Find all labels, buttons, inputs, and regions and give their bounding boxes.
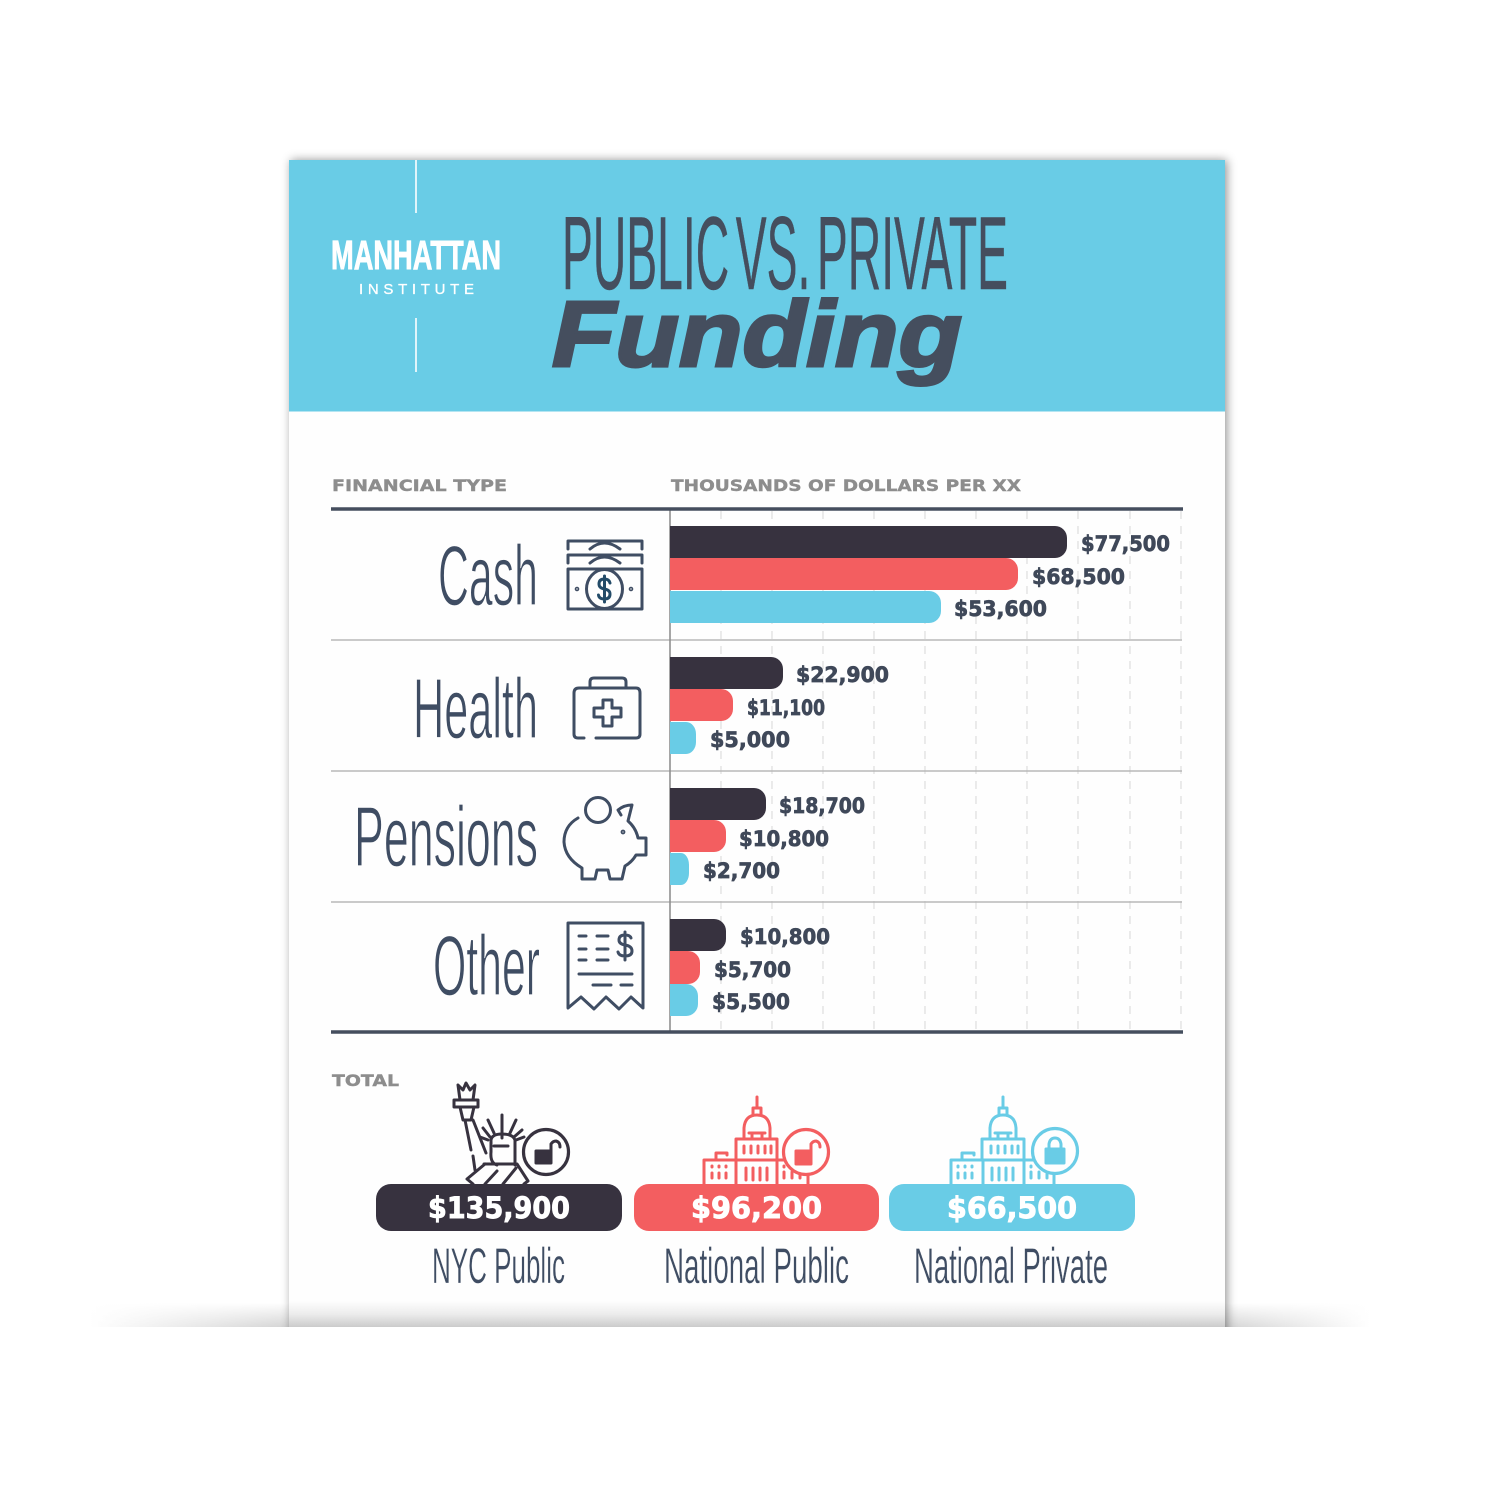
bars: Pensions: $2,700 — [703, 859, 780, 883]
icon: receipt — [568, 923, 643, 1009]
bars: Pensions: $18,700 — [779, 794, 865, 818]
logo: Manhattan Institute — [331, 160, 501, 372]
row: Other — [433, 919, 830, 1016]
bars: Health: $11,100 — [747, 696, 825, 720]
bars: Pensions — [670, 788, 865, 885]
bars: Cash: $77,500 — [1081, 532, 1170, 556]
icon: capitol building with closed lock — [951, 1097, 1078, 1184]
logo: Manhattan Institute: MANHATTAN — [331, 232, 501, 278]
label: National Public: National Public — [664, 1238, 849, 1294]
label: Pensions: Pensions — [354, 790, 538, 885]
bars: Other: $5,500 — [712, 990, 790, 1014]
row: Health — [413, 657, 889, 757]
bars: Other — [670, 919, 830, 1016]
total: National Public: $96,200 — [691, 1191, 822, 1225]
pill: $96,200 — [634, 1184, 879, 1231]
icon: cash bills — [568, 541, 642, 609]
bars: Pensions: $10,800 — [739, 827, 829, 851]
header band — [289, 160, 1225, 412]
title: Funding — [552, 282, 962, 386]
total: National Private: $66,500 — [947, 1191, 1077, 1225]
label: Cash: Cash — [438, 529, 538, 624]
bars: Other: $10,800 — [740, 925, 830, 949]
title — [552, 196, 1008, 386]
icon: Statue of Liberty with open lock — [454, 1083, 568, 1184]
bars: Health: $22,900 — [796, 663, 889, 687]
row: Cash — [438, 526, 1170, 624]
bars: Other: $5,700 — [714, 958, 791, 982]
chart grid — [331, 509, 1183, 1032]
label: National Private: National Private — [914, 1238, 1108, 1294]
bars: Health: $5,000 — [710, 728, 790, 752]
label: Health: Health — [413, 662, 538, 757]
icon: first aid kit — [574, 678, 640, 738]
column heading: financial type: FINANCIAL TYPE — [332, 476, 507, 495]
heading: total: TOTAL — [332, 1071, 399, 1090]
total: National Private — [889, 1097, 1135, 1294]
pill: $66,500 — [889, 1184, 1135, 1231]
total: NYC Public — [376, 1083, 622, 1294]
bars: Cash — [670, 526, 1170, 623]
bars: Cash: $68,500 — [1032, 565, 1125, 589]
card bottom shadow — [289, 1301, 1225, 1327]
bars: Cash: $53,600 — [954, 597, 1047, 621]
total: National Public — [634, 1097, 879, 1294]
logo: Manhattan Institute: INSTITUTE — [359, 281, 474, 298]
column heading: thousands of dollars: THOUSANDS OF DOLLARS PER XX — [671, 476, 1022, 495]
row: Pensions — [354, 788, 865, 885]
total: NYC Public: $135,900 — [428, 1191, 570, 1225]
bars: Health — [670, 657, 889, 754]
pill: $135,900 — [376, 1184, 622, 1231]
label: Other: Other — [433, 919, 540, 1014]
icon: capitol building with open lock — [704, 1097, 828, 1184]
label: NYC Public: NYC Public — [432, 1238, 565, 1294]
icon: piggy bank — [564, 798, 646, 879]
